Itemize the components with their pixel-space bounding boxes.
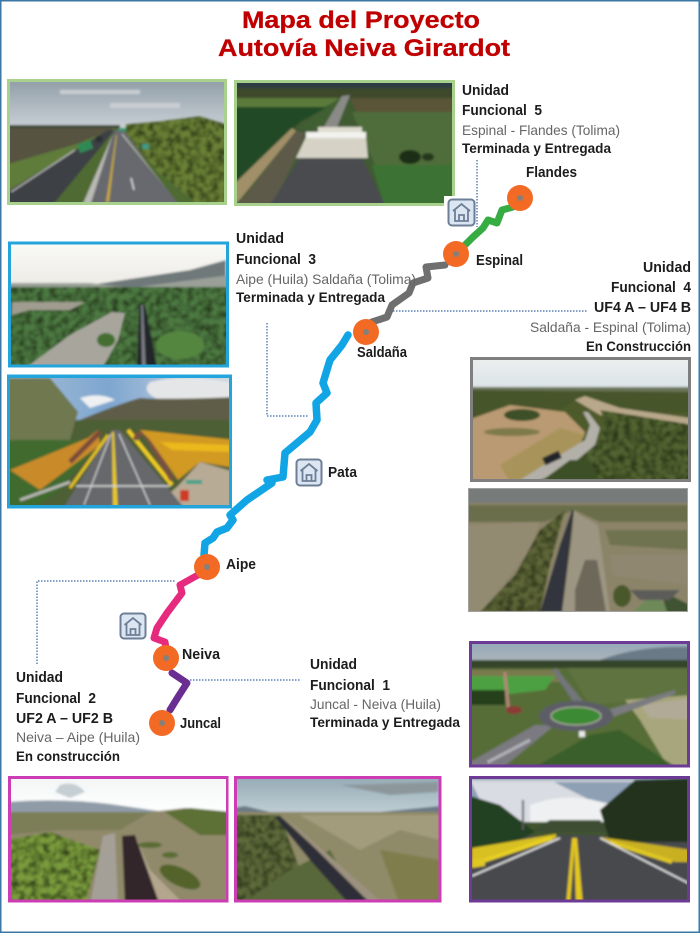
marker: Aipe (194, 554, 220, 580)
route: UF4 gray (372, 265, 445, 322)
text block: Unidad Funcional 1 (310, 656, 460, 730)
text block: Unidad Funcional 1: Unidad (310, 656, 357, 673)
text block: Unidad Funcional 1: Juncal - Neiva (Huila) (310, 696, 441, 712)
text block: Unidad Funcional 4 (530, 259, 692, 354)
text block: Unidad Funcional 5: Unidad (462, 82, 509, 99)
place label: Flandes: Flandes (526, 164, 577, 181)
route: UF1 purple (170, 673, 187, 710)
place label: Juncal: Juncal (180, 715, 221, 732)
photo: highway with green truck (5, 78, 230, 208)
marker: Neiva (153, 645, 179, 671)
text block: Unidad Funcional 2: UF2 A – UF2 B (16, 710, 113, 727)
route map (149, 185, 533, 736)
photo: aerial valley with road (6, 240, 231, 372)
leader line: UF3 (267, 323, 308, 416)
photo: sandy land with curved road (468, 355, 693, 482)
leader line: UF4 (393, 310, 588, 312)
text block: Unidad Funcional 3: Terminada y Entregada (236, 289, 385, 305)
title: Autovía Neiva Girardot (218, 35, 510, 62)
text block: Unidad Funcional 5: Funcional 5 (462, 102, 542, 119)
leader line: UF1 (190, 679, 300, 681)
text block: Unidad Funcional 3: Unidad (236, 230, 284, 247)
text block: Unidad Funcional 4: UF4 A – UF4 B (594, 299, 691, 316)
marker: Saldaña (353, 319, 379, 345)
title: Mapa del Proyecto (242, 7, 480, 34)
text block: Unidad Funcional 2: En construcción (16, 748, 120, 764)
place label: Neiva: Neiva (182, 646, 221, 663)
photo: highway across dry savanna (232, 775, 444, 907)
route: UF2 magenta (154, 575, 198, 648)
leader line: UF5 (476, 160, 478, 227)
text block: Unidad Funcional 5 (462, 82, 620, 156)
leader line: UF2 (37, 581, 175, 664)
text block: Unidad Funcional 1: Terminada y Entregada (310, 714, 460, 730)
place label: Pata: Pata (328, 464, 358, 481)
place label: Espinal: Espinal (476, 252, 523, 269)
text block: Unidad Funcional 4: Saldaña - Espinal (Tolima) (530, 319, 691, 335)
photo: yellow truss bridge (5, 372, 235, 512)
text block: Unidad Funcional 4: Unidad (643, 259, 691, 276)
text block: Unidad Funcional 2: Neiva – Aipe (Huila) (16, 729, 140, 745)
text block: Unidad Funcional 2: Funcional 2 (16, 690, 96, 707)
text block: Unidad Funcional 2: Unidad (16, 669, 63, 686)
photo: roundabout (467, 640, 692, 770)
text block: Unidad Funcional 4: Funcional 4 (611, 279, 692, 296)
photo: road under construction (465, 485, 690, 615)
text block: Unidad Funcional 4: En Construcción (586, 338, 691, 354)
photo: road through dry hills (6, 775, 231, 905)
marker: Espinal (443, 241, 469, 267)
photo: road with yellow bridge barriers (465, 775, 692, 905)
text block: Unidad Funcional 1: Funcional 1 (310, 677, 390, 694)
place label: Aipe: Aipe (226, 556, 256, 573)
text block: Unidad Funcional 2 (16, 669, 140, 764)
text block: Unidad Funcional 3: Aipe (Huila) Saldaña (Tolima) (236, 271, 416, 287)
route: UF5 green (456, 207, 513, 254)
icon: house near Neiva (120, 614, 146, 638)
route: UF3 blue (204, 335, 348, 555)
marker: Juncal (149, 710, 175, 736)
text block: Unidad Funcional 3: Funcional 3 (236, 251, 316, 268)
place label: Saldaña: Saldaña (357, 344, 408, 361)
text block: Unidad Funcional 3 (236, 230, 416, 305)
icon: house at Pata (296, 460, 322, 486)
marker: Flandes (507, 185, 533, 211)
title (218, 7, 510, 62)
photo: toll plaza (232, 78, 460, 208)
white backing behind house icon (444, 196, 456, 208)
text block: Unidad Funcional 5: Terminada y Entregada (462, 140, 611, 156)
icon: house near Espinal (448, 200, 474, 226)
text block: Unidad Funcional 5: Espinal - Flandes (Tolima) (462, 122, 620, 138)
